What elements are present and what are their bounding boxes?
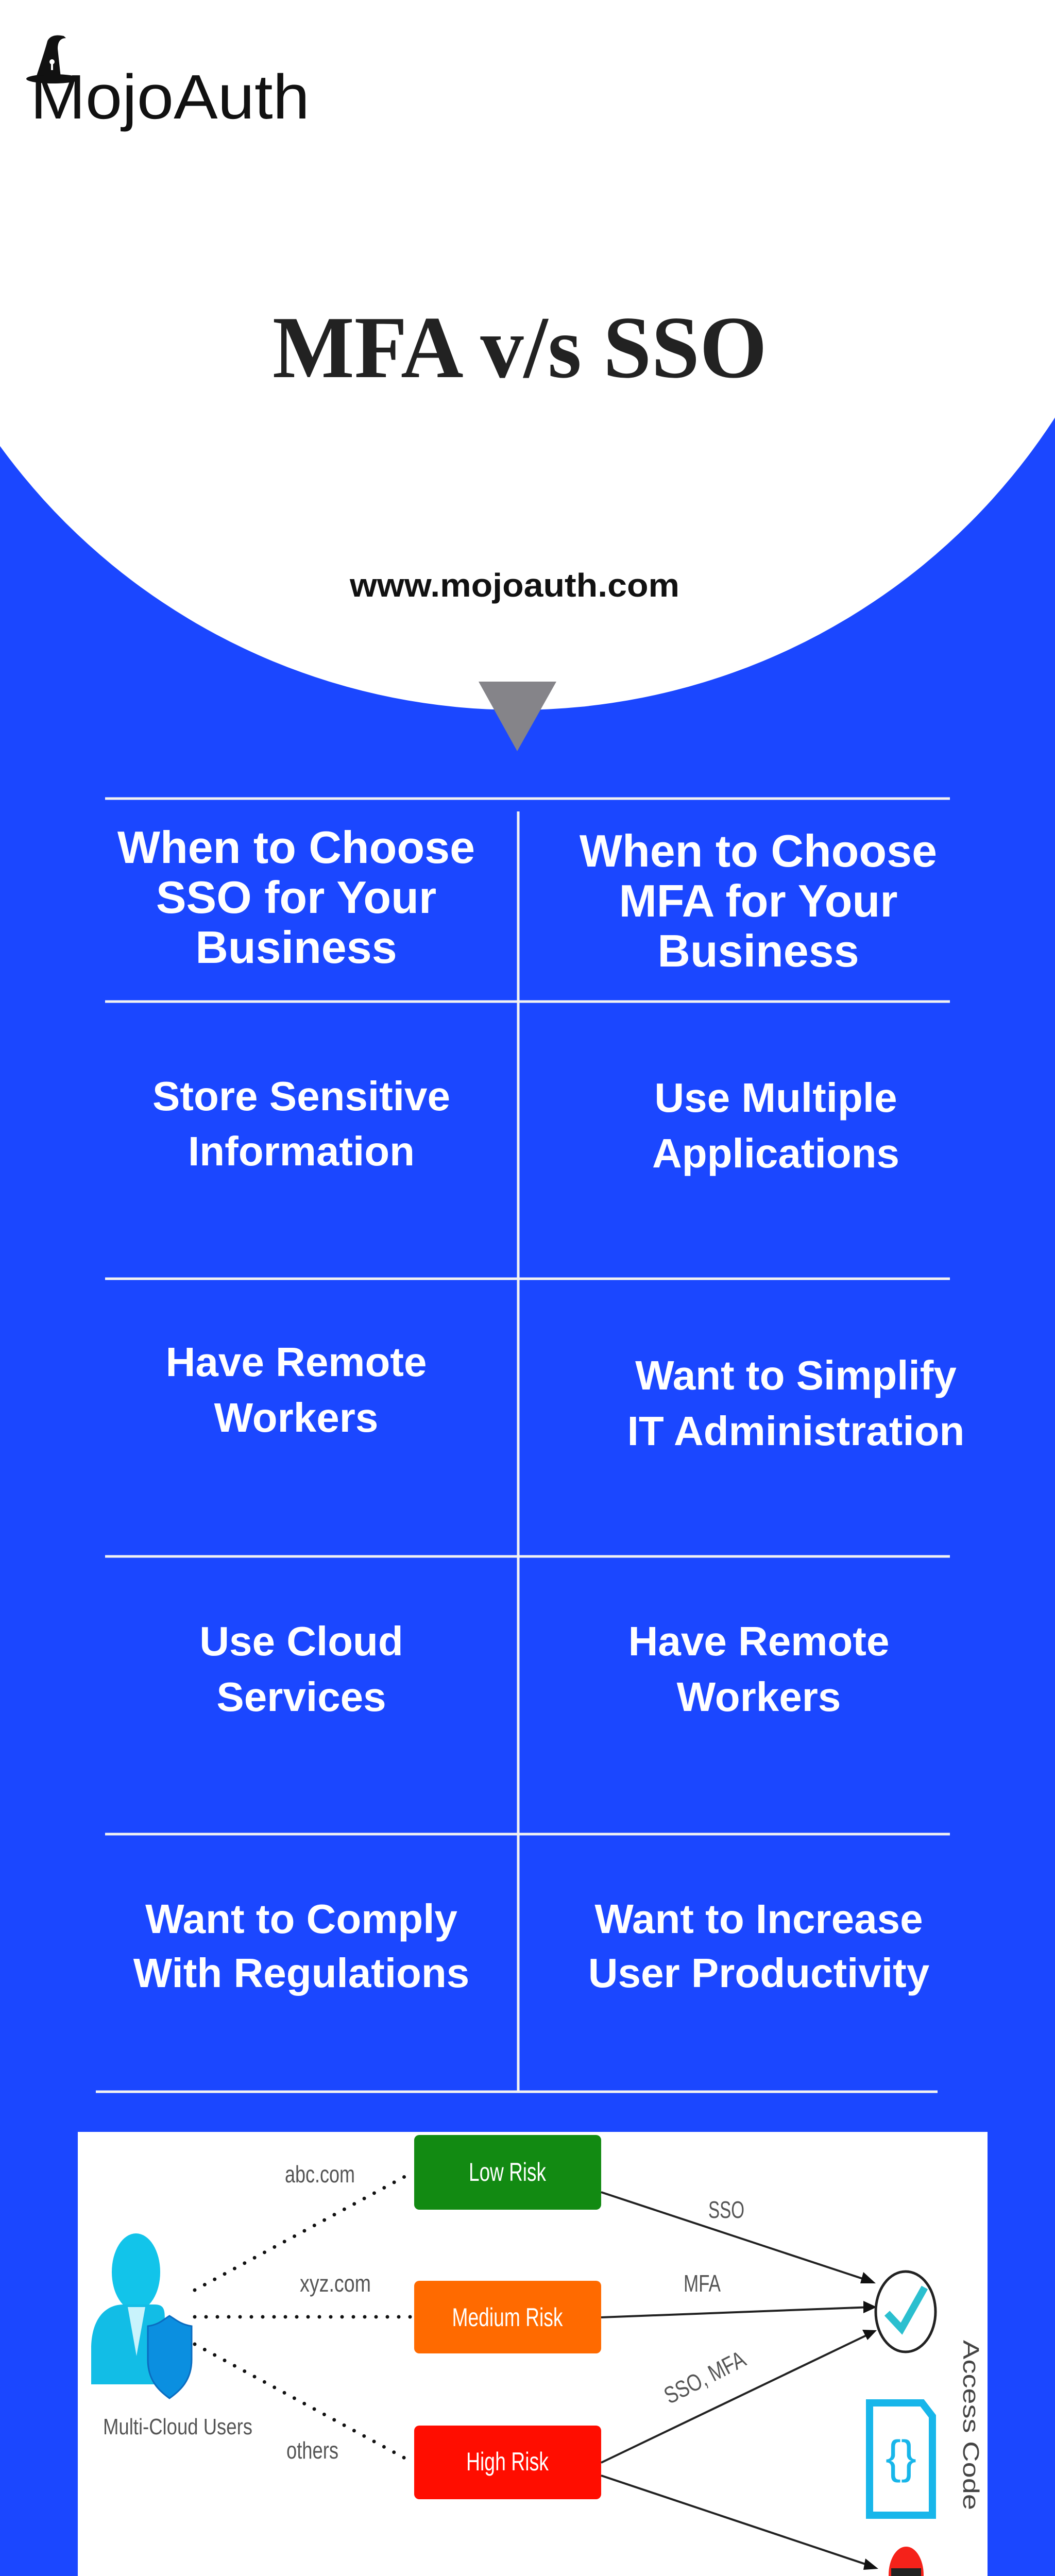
logo: MojoAuth (26, 35, 310, 132)
heading: MFA column: When to Choose (580, 825, 937, 876)
box: High Risk: High Risk (466, 2447, 549, 2476)
heading: SSO column: SSO for Your (156, 872, 436, 923)
heading: SSO column: Business (195, 922, 397, 973)
box: Low Risk (414, 2135, 601, 2210)
label: Access Code: Access Code (958, 2340, 983, 2510)
heading: SSO column: When to Choose (117, 822, 475, 873)
row 1 right: Applications (652, 1130, 899, 1176)
row 2 right: IT Administration (627, 1408, 964, 1454)
row 3 right: Have Remote (628, 1618, 889, 1664)
icon: code document (870, 2403, 932, 2515)
arrow labels: MFA (684, 2270, 721, 2297)
row 4 right: User Productivity (588, 1950, 930, 1996)
row 4 right: Want to Increase (594, 1896, 923, 1942)
icon: check circle (876, 2272, 935, 2352)
row 2 right: Want to Simplify (635, 1352, 957, 1398)
row 3 left: Use Cloud (199, 1618, 403, 1664)
domain labels: xyz.com (300, 2270, 371, 2297)
arrow labels: SSO, MFA (659, 2345, 750, 2409)
row 3 left: Services (216, 1674, 386, 1720)
comparison table (96, 799, 964, 2092)
title: MFA v/s SSO (273, 299, 767, 397)
domain labels (285, 2161, 371, 2464)
arrow labels: SSO (708, 2196, 744, 2223)
row 2 left: Have Remote (166, 1339, 427, 1385)
icon: stop sign (889, 2547, 924, 2576)
arrow labels (659, 2196, 750, 2409)
logo: MojoAuth: MojoAuth (30, 62, 310, 132)
diagram panel (78, 2132, 988, 2576)
icon: user with shield (91, 2233, 192, 2398)
arrow: down triangle (479, 682, 556, 751)
url text: www.mojoauth.com (349, 567, 679, 604)
heading: MFA column: MFA for Your (619, 875, 898, 926)
row 4 left: Want to Comply (145, 1896, 457, 1942)
domain labels: abc.com (285, 2161, 355, 2188)
heading: MFA column: Business (657, 925, 859, 976)
dotted connectors (195, 2172, 413, 2463)
row 1 left: Store Sensitive (152, 1073, 450, 1119)
header circle background (0, 0, 1055, 710)
box: Low Risk: Low Risk (469, 2158, 547, 2187)
row 1 right: Use Multiple (654, 1075, 897, 1121)
row 4 left: With Regulations (133, 1950, 469, 1996)
box: High Risk (414, 2426, 601, 2499)
icon: wizard hat (26, 35, 80, 83)
arrows (601, 2192, 878, 2570)
label: Multi-Cloud Users: Multi-Cloud Users (103, 2414, 252, 2439)
box: Medium Risk: Medium Risk (452, 2303, 563, 2332)
row 1 left: Information (188, 1128, 415, 1174)
domain labels: others (286, 2437, 338, 2464)
box: Medium Risk (414, 2281, 601, 2353)
row 3 right: Workers (677, 1674, 841, 1720)
row 2 left: Workers (214, 1395, 378, 1440)
icon: code document: {} (886, 2432, 916, 2483)
